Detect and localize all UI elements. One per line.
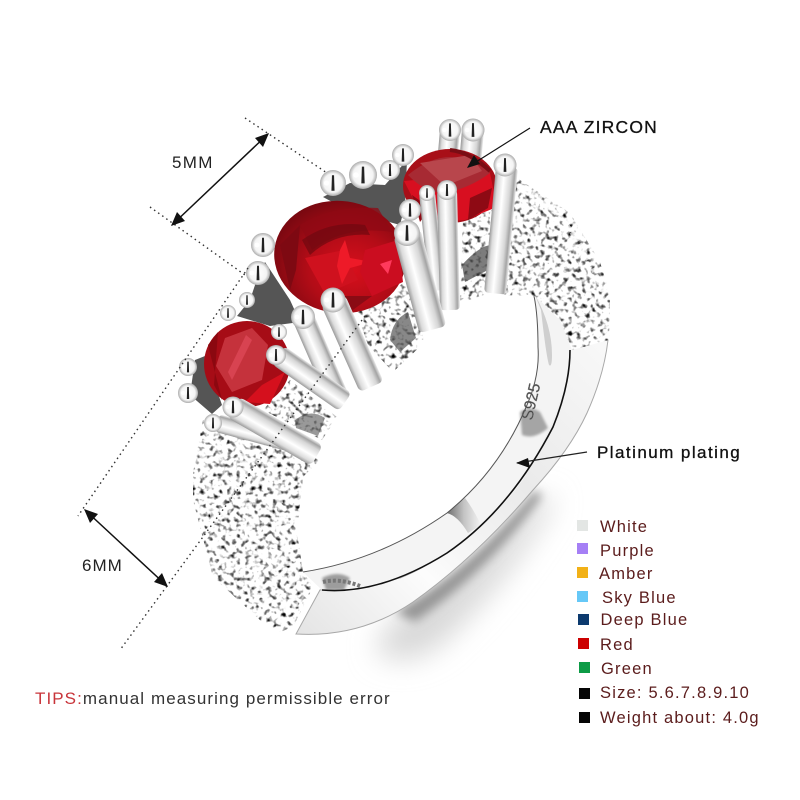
ring bbox=[178, 118, 610, 660]
purple label: Purple bbox=[600, 542, 655, 560]
purple swatch bbox=[577, 543, 588, 554]
weight label: Weight about: 4.0g bbox=[600, 709, 760, 727]
red swatch bbox=[578, 638, 589, 649]
amber swatch bbox=[577, 567, 588, 578]
band inner face bbox=[303, 295, 571, 592]
S925 stamp: S925 bbox=[519, 382, 544, 422]
large centre gem bbox=[267, 192, 413, 322]
sky blue swatch bbox=[577, 591, 588, 602]
back prongs bbox=[437, 118, 484, 165]
left shoulder pave bbox=[193, 420, 320, 632]
tips note: TIPS:manual measuring permissible error bbox=[35, 689, 391, 708]
right shoulder pave bbox=[498, 170, 610, 350]
small left gem bbox=[204, 321, 290, 407]
platinum plating callout arrow bbox=[516, 452, 587, 468]
AAA zircon label: AAA ZIRCON bbox=[540, 117, 658, 137]
white swatch bbox=[577, 520, 588, 531]
5MM label: 5MM bbox=[172, 153, 214, 172]
legend: colours and specifications bbox=[577, 518, 760, 727]
prong beads bbox=[178, 144, 516, 432]
red label: Red bbox=[600, 636, 634, 654]
band outer face bbox=[296, 320, 608, 634]
amber label: Amber bbox=[599, 565, 654, 583]
AAA zircon callout arrow bbox=[467, 128, 530, 168]
deep blue label: Deep Blue bbox=[600, 611, 688, 629]
top gem bbox=[403, 149, 497, 223]
6MM label: 6MM bbox=[82, 556, 123, 575]
prongs bbox=[215, 166, 518, 466]
green swatch bbox=[579, 662, 590, 673]
band black edge lines bbox=[303, 296, 570, 591]
white label: White bbox=[600, 518, 648, 536]
dotted guide lines bbox=[78, 118, 365, 650]
size swatch bbox=[579, 688, 590, 699]
band shadow bbox=[375, 490, 555, 660]
center setting pave bbox=[263, 207, 500, 440]
5MM dimension arrow bbox=[171, 133, 269, 226]
deep blue swatch bbox=[578, 614, 589, 625]
weight swatch bbox=[579, 712, 590, 723]
platinum plating label: Platinum plating bbox=[597, 443, 741, 462]
dark metal basket bbox=[190, 160, 407, 414]
inner shaded patches bbox=[322, 295, 552, 590]
green label: Green bbox=[601, 660, 653, 678]
size label: Size: 5.6.7.8.9.10 bbox=[600, 684, 750, 702]
6MM dimension arrow bbox=[84, 509, 168, 587]
sky blue label: Sky Blue bbox=[602, 589, 677, 607]
